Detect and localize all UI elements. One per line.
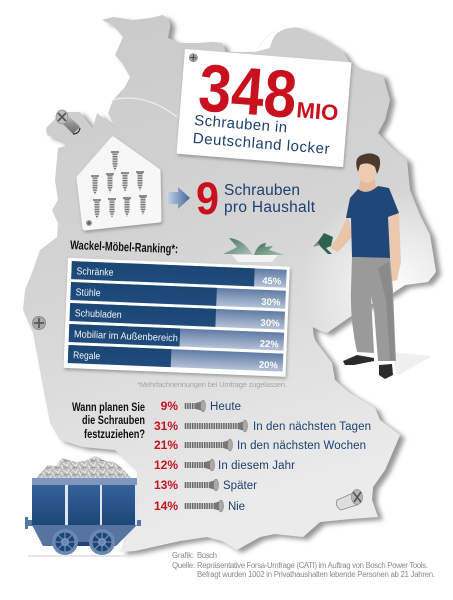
house of screws	[79, 139, 159, 228]
ranking footnote: *Mehrfachnennungen bei Umfrage zugelassen.	[137, 380, 287, 389]
axle bar	[65, 542, 102, 546]
hair	[356, 153, 380, 174]
bar: Schubladen 30 percent: 30%	[260, 318, 280, 329]
answer später: Später	[223, 480, 257, 492]
buffers	[25, 517, 141, 529]
house screw fixing	[86, 220, 92, 226]
shirt	[346, 186, 399, 258]
question text	[72, 400, 145, 441]
trousers	[351, 257, 396, 361]
mine cart with screws	[25, 456, 141, 557]
bar: Mobiliar 22 percent	[69, 324, 284, 351]
answer Heute	[161, 399, 241, 413]
neck	[358, 178, 377, 194]
bar: Regale 20 percent	[68, 345, 283, 372]
small screws	[91, 152, 147, 219]
unit MIO: MIO	[295, 97, 339, 125]
answer nächste Tage: In den nächsten Tagen	[253, 421, 371, 433]
big number: 348	[196, 50, 300, 133]
cart panels	[32, 485, 135, 526]
source credits: Befragt wurden 1002 in Privathaushalten lebende Personen ab 21 Jahren.	[197, 570, 435, 579]
answer nächste Wochen: In den nächsten Wochen	[237, 440, 366, 452]
answer Heute: 9%	[161, 399, 178, 413]
wheel left	[52, 529, 78, 555]
bar: Stühle 30 percent: Stühle	[75, 287, 101, 299]
cart lip	[32, 478, 137, 485]
headline card	[177, 49, 351, 167]
answer nächste Tage	[154, 419, 371, 433]
cart base	[32, 525, 137, 546]
question text: die Schrauben	[82, 413, 145, 427]
answer nächste Wochen: 21%	[154, 438, 178, 452]
card screw	[189, 53, 198, 62]
answer list with screw bars	[154, 399, 371, 513]
subtitle line 2: Deutschland locker	[192, 130, 330, 158]
bar: Schränke 45 percent: 45%	[262, 276, 282, 288]
source credits: Quelle:	[172, 561, 195, 570]
bar: Mobiliar 22 percent: 22%	[259, 339, 279, 350]
screw in map, bottom right	[336, 490, 362, 510]
bar: Schränke 45 percent	[71, 261, 287, 288]
bar: Regale 20 percent: Regale	[73, 350, 101, 362]
answer nie: Nie	[228, 501, 245, 513]
screw in map, top left	[56, 110, 80, 134]
shoes	[343, 355, 393, 379]
arrow	[168, 187, 190, 209]
plant	[223, 238, 285, 262]
drill	[317, 233, 333, 254]
floor shadow	[392, 352, 432, 376]
answer in diesem Jahr: In diesem Jahr	[218, 460, 295, 472]
source credits: Bosch	[197, 551, 217, 560]
screws per household text: Schrauben	[224, 182, 300, 199]
answer nie	[154, 499, 245, 513]
bar: Schränke 45 percent: Schränke	[76, 266, 114, 279]
cart body	[32, 485, 137, 526]
bar: Stühle 30 percent	[70, 282, 286, 309]
source credits	[172, 551, 435, 579]
answer Heute: Heute	[210, 401, 241, 413]
screw in map, left	[32, 316, 46, 330]
answer nie: 14%	[154, 499, 178, 513]
bar: Stühle 30 percent: 30%	[261, 297, 281, 308]
arms	[330, 216, 353, 252]
wheel right	[89, 529, 115, 555]
screw heap	[36, 456, 131, 478]
bar: Mobiliar 22 percent: Mobiliar im Außenbereich	[74, 329, 178, 344]
source credits: Grafik:	[172, 551, 194, 560]
screws per household text	[224, 182, 316, 216]
bar: Schubladen 30 percent	[69, 303, 285, 330]
ranking heading: Wackel-Möbel-Ranking*:	[70, 238, 178, 256]
subtitle line 1: Schrauben in	[194, 112, 288, 136]
question text: Wann planen Sie	[72, 400, 145, 414]
head	[358, 157, 376, 183]
person with drill	[313, 153, 432, 379]
question text: festzuziehen?	[84, 427, 145, 441]
ranking panel	[64, 258, 290, 377]
answer in diesem Jahr: 12%	[154, 458, 178, 472]
ground shadow	[28, 555, 128, 557]
answer nächste Tage: 31%	[154, 419, 178, 433]
answer nächste Wochen	[154, 438, 366, 452]
source credits: Repräsentative Forsa-Umfrage (CATI) im Auftrag von Bosch Power Tools.	[197, 561, 428, 570]
bar: Regale 20 percent: 20%	[259, 360, 279, 371]
bar: Schubladen 30 percent: Schubladen	[75, 308, 122, 321]
answer in diesem Jahr	[154, 458, 295, 472]
screws per household text: pro Haushalt	[224, 199, 316, 216]
nine screws number: 9	[196, 173, 219, 224]
answer später: 13%	[154, 478, 178, 492]
answer später	[154, 478, 257, 492]
